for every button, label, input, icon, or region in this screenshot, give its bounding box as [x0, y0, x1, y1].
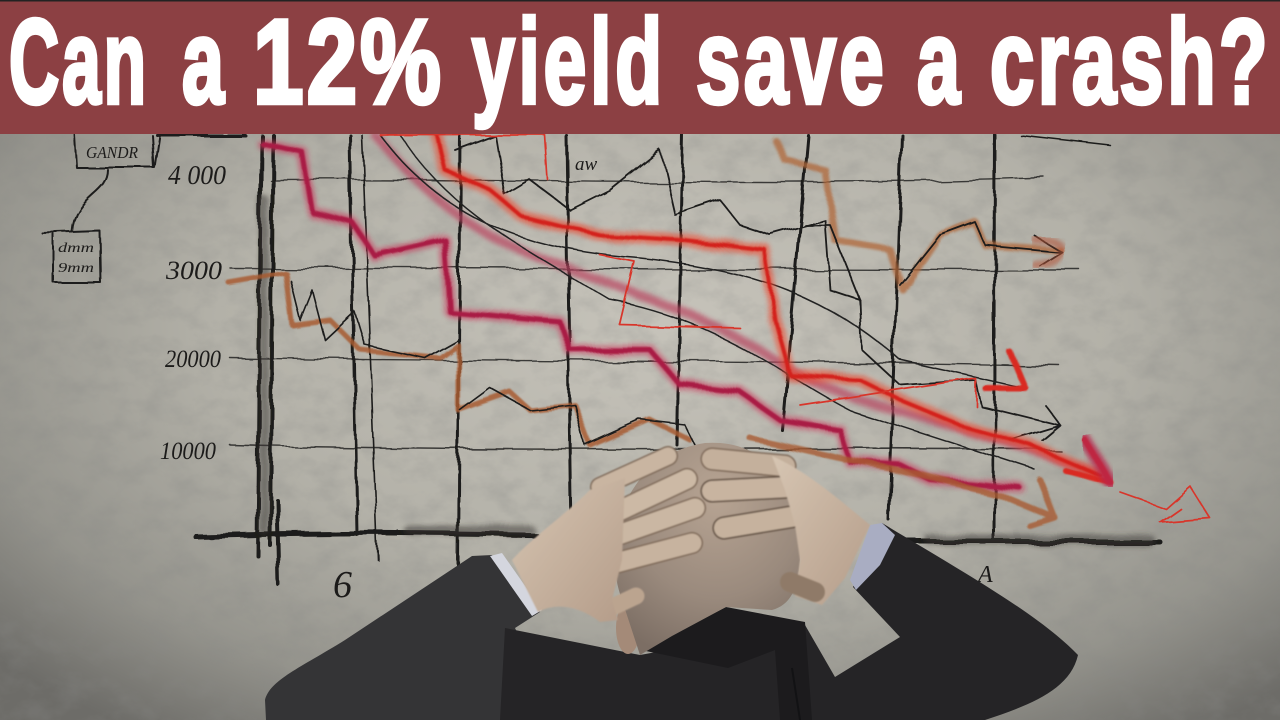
- axis smudge: [264, 200, 1150, 540]
- crimson trend line: [262, 143, 1020, 488]
- banner background: [0, 0, 1280, 134]
- orange lower left line: [228, 272, 690, 445]
- label 20000: 20000: [165, 346, 221, 373]
- thin black curve lines: [380, 135, 1025, 388]
- arrow smudge: [1035, 239, 1061, 265]
- black zigzag line: [455, 135, 1060, 440]
- title text: [9, 0, 1271, 129]
- small note: aw: [575, 154, 598, 175]
- right hand back: [772, 456, 870, 605]
- small flowchart boxes: [42, 135, 1110, 283]
- label 6: 6: [333, 564, 352, 606]
- box text lower: dmm: [58, 241, 94, 256]
- red arrow heads: [985, 352, 1110, 482]
- right hand: [712, 456, 870, 605]
- right fingers: [712, 459, 815, 528]
- top edge: [0, 0, 1280, 2]
- centre back seam: [792, 668, 800, 720]
- black lower left line: [290, 280, 695, 445]
- jacket back: [500, 523, 1078, 720]
- thin red lines: [380, 135, 1210, 522]
- collar: [641, 607, 812, 720]
- pink diagonal band: [375, 135, 1100, 475]
- jacket left arm: [265, 555, 560, 720]
- label 4000: 4 000: [168, 160, 226, 190]
- handwritten labels: [58, 143, 993, 606]
- label 3000: 3000: [165, 256, 222, 285]
- left hand: [512, 456, 695, 622]
- orange upper right line: [775, 140, 1060, 290]
- neck and head: [614, 443, 800, 655]
- label 10000: 10000: [160, 438, 216, 465]
- label A: A: [976, 562, 993, 588]
- left hand back: [512, 478, 625, 622]
- chart grid: [195, 135, 1160, 585]
- red main trend line: [437, 135, 1100, 475]
- box text GANDR: GANDR: [86, 143, 139, 162]
- title banner: [0, 0, 1280, 134]
- upper right arrow: [805, 222, 1062, 300]
- lower right orange arrow: [750, 438, 1055, 526]
- man from behind: [265, 443, 1078, 720]
- shirt cuff right: [850, 523, 895, 590]
- pink blob near arrow: [1085, 440, 1110, 482]
- right thumb: [790, 582, 815, 592]
- box text lower second line: 9mm: [58, 261, 94, 276]
- left fingers: [600, 456, 695, 612]
- shirt cuff left: [490, 553, 542, 616]
- sketched chart: [42, 135, 1210, 585]
- ear: [616, 602, 640, 654]
